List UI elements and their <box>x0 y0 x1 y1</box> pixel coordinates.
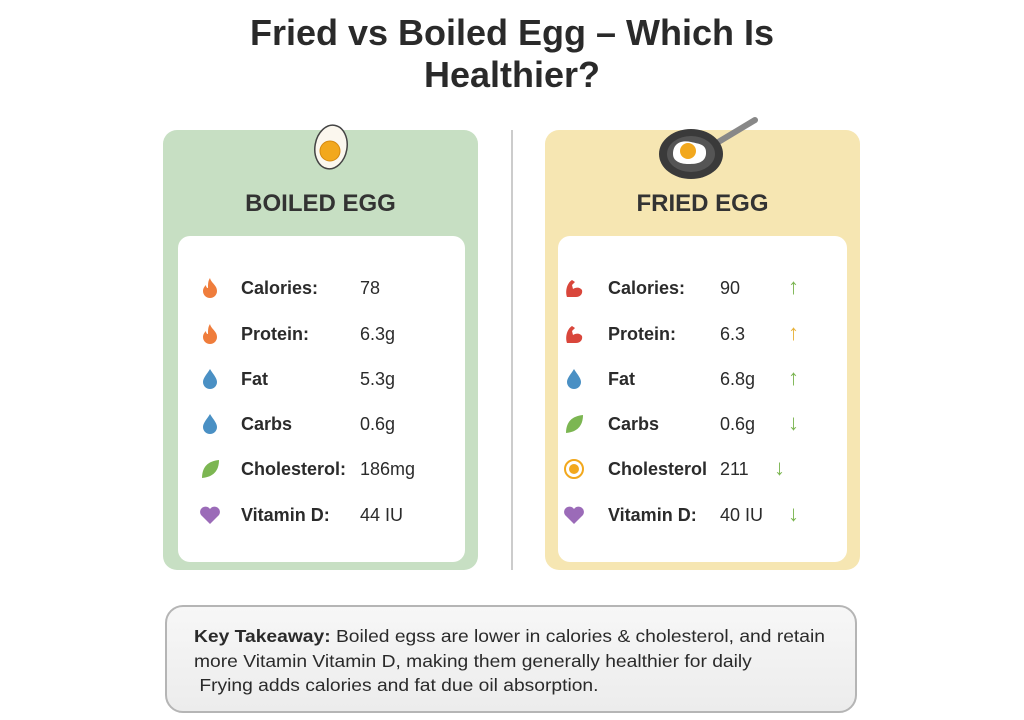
row: cholesterol: 211 <box>720 459 749 479</box>
panel: boiled inner <box>178 236 465 562</box>
row: calories: ↑ <box>788 274 799 299</box>
row: protein <box>203 324 395 344</box>
row: carbs: Carbs <box>608 414 659 434</box>
row: fat: ↑ <box>788 365 799 390</box>
panel: fried inner <box>558 236 847 562</box>
row: carbs: 0.6g <box>360 414 395 434</box>
panel: fried egg <box>545 130 860 570</box>
row: vitamin d: Vitamin D: <box>241 505 330 525</box>
row: vitamin d: Vitamin D: <box>608 505 697 525</box>
row: cholesterol: Cholesterol: <box>241 459 346 479</box>
row: carbs <box>203 414 395 434</box>
title: Healthier? <box>424 54 600 95</box>
callout: key takeaway: Key Takeaway: Boiled egss are lower in calories & cholesterol, and retain <box>194 626 825 646</box>
row: vitamin d: ↓ <box>788 501 799 526</box>
callout: key takeaway: Frying adds calories and fat due oil absorption. <box>199 675 598 695</box>
row: vitamin d <box>200 505 403 525</box>
row: protein: 6.3 <box>720 324 745 344</box>
row: fat: 6.8g <box>720 369 755 389</box>
row: carbs <box>566 410 799 435</box>
heading: boiled: BOILED EGG <box>245 190 396 217</box>
row: calories: Calories: <box>241 278 318 298</box>
row: protein <box>566 320 799 345</box>
row: protein: ↑ <box>788 320 799 345</box>
row: fat <box>567 365 799 390</box>
row: protein: 6.3g <box>360 324 395 344</box>
icon: frying pan <box>659 117 758 179</box>
divider <box>511 130 513 570</box>
row: calories: 78 <box>360 278 380 298</box>
row: cholesterol <box>202 459 415 479</box>
row: protein: Protein: <box>241 324 309 344</box>
heading: fried: FRIED EGG <box>636 190 768 217</box>
panel: boiled egg <box>163 130 478 570</box>
row: cholesterol: ↓ <box>774 455 785 480</box>
row: fat: Fat <box>241 369 268 389</box>
row: calories: Calories: <box>608 278 685 298</box>
icon: boiled egg <box>314 124 348 170</box>
row: carbs: Carbs <box>241 414 292 434</box>
title <box>250 12 774 95</box>
row: fat <box>203 369 395 389</box>
row: vitamin d: 40 IU <box>720 505 763 525</box>
row: protein: Protein: <box>608 324 676 344</box>
title: Fried vs Boiled Egg – Which Is <box>250 12 774 53</box>
row: calories: 90 <box>720 278 740 298</box>
callout: key takeaway: more Vitamin Vitamin D, making them generally healthier for daily <box>194 650 752 670</box>
row: carbs: ↓ <box>788 410 799 435</box>
row: cholesterol <box>564 455 785 480</box>
row: vitamin d <box>564 501 799 526</box>
row: cholesterol: Cholesterol <box>608 459 707 479</box>
row: carbs: 0.6g <box>720 414 755 434</box>
row: calories <box>566 274 799 299</box>
row: vitamin d: 44 IU <box>360 505 403 525</box>
row: fat: Fat <box>608 369 635 389</box>
row: cholesterol: 186mg <box>360 459 415 479</box>
callout: key takeaway <box>165 605 857 713</box>
row: calories <box>203 278 380 298</box>
row: fat: 5.3g <box>360 369 395 389</box>
